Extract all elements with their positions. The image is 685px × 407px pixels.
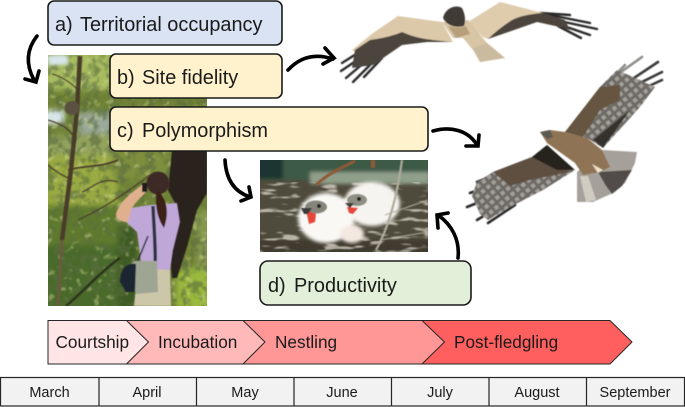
month scale — [0, 378, 684, 406]
chicks — [298, 182, 400, 243]
dark pine trunk — [168, 150, 207, 278]
binoculars — [142, 183, 147, 192]
label box: d) Productivity: Productivity — [294, 275, 397, 297]
label box: b) Site fidelity — [110, 54, 282, 98]
body and tail — [442, 20, 505, 62]
sky gaps — [48, 55, 68, 122]
label box: d) Productivity — [260, 261, 471, 305]
stage: nestling: Nestling — [275, 332, 337, 352]
month scale: March — [29, 385, 70, 401]
tail — [577, 150, 637, 202]
stage: post-fledgling — [422, 320, 632, 364]
month scale: August — [514, 385, 560, 401]
stage: post-fledgling: Post-fledgling — [454, 332, 558, 352]
person head and hair — [146, 172, 170, 194]
branch — [316, 161, 355, 185]
person shirt — [124, 203, 180, 270]
camera strap — [153, 206, 155, 266]
person trousers — [134, 268, 171, 306]
photo: two nestlings calling in the nest — [260, 160, 428, 252]
nest — [64, 101, 80, 115]
month scale: June — [326, 385, 358, 401]
wing feather tips — [341, 13, 597, 82]
upper wing feather tips — [607, 57, 662, 92]
stage: nestling — [243, 320, 444, 364]
arrow: site fidelity to upper eagle — [288, 48, 334, 70]
body — [540, 130, 610, 175]
right wing — [468, 2, 565, 39]
month scale: May — [231, 385, 259, 401]
label box: b) Site fidelity: b) — [117, 67, 135, 89]
arrow: productivity to nestlings — [437, 213, 458, 258]
month scale: July — [427, 385, 454, 401]
label box: c) Polymorphism — [110, 107, 428, 151]
arrow: polymorphism to lower eagle — [433, 129, 479, 146]
phenology timeline — [48, 320, 632, 364]
arrow: polymorphism to nestlings — [225, 160, 251, 201]
stage: courtship — [48, 320, 148, 364]
lower wing — [472, 145, 575, 220]
photo: observer watching a nest with binoculars — [48, 55, 207, 306]
stage: courtship: Courtship — [56, 332, 129, 352]
label box: c) Polymorphism: c) — [117, 120, 134, 142]
stage: incubation — [126, 320, 265, 364]
label box: d) Productivity: d) — [268, 275, 286, 297]
person arm — [116, 184, 147, 222]
left wing — [352, 16, 453, 65]
label box: a) Territorial occupancy — [48, 1, 282, 45]
upper wing — [565, 70, 655, 148]
month scale: September — [600, 385, 671, 401]
lower eagle: dark morph from below — [467, 57, 662, 223]
lower wing feather tips — [467, 174, 515, 223]
label box: a) Territorial occupancy: Territorial occupancy — [80, 14, 262, 36]
stage: incubation: Incubation — [158, 332, 237, 352]
head — [443, 6, 465, 27]
label box: c) Polymorphism: Polymorphism — [142, 120, 268, 142]
bag — [128, 261, 158, 294]
label box: a) Territorial occupancy: a) — [55, 14, 73, 36]
arrow: territorial occupancy to photo — [25, 36, 39, 82]
upper eagle: pale morph from below — [341, 2, 597, 82]
month scale: April — [132, 385, 162, 401]
label box: b) Site fidelity: Site fidelity — [142, 67, 238, 89]
